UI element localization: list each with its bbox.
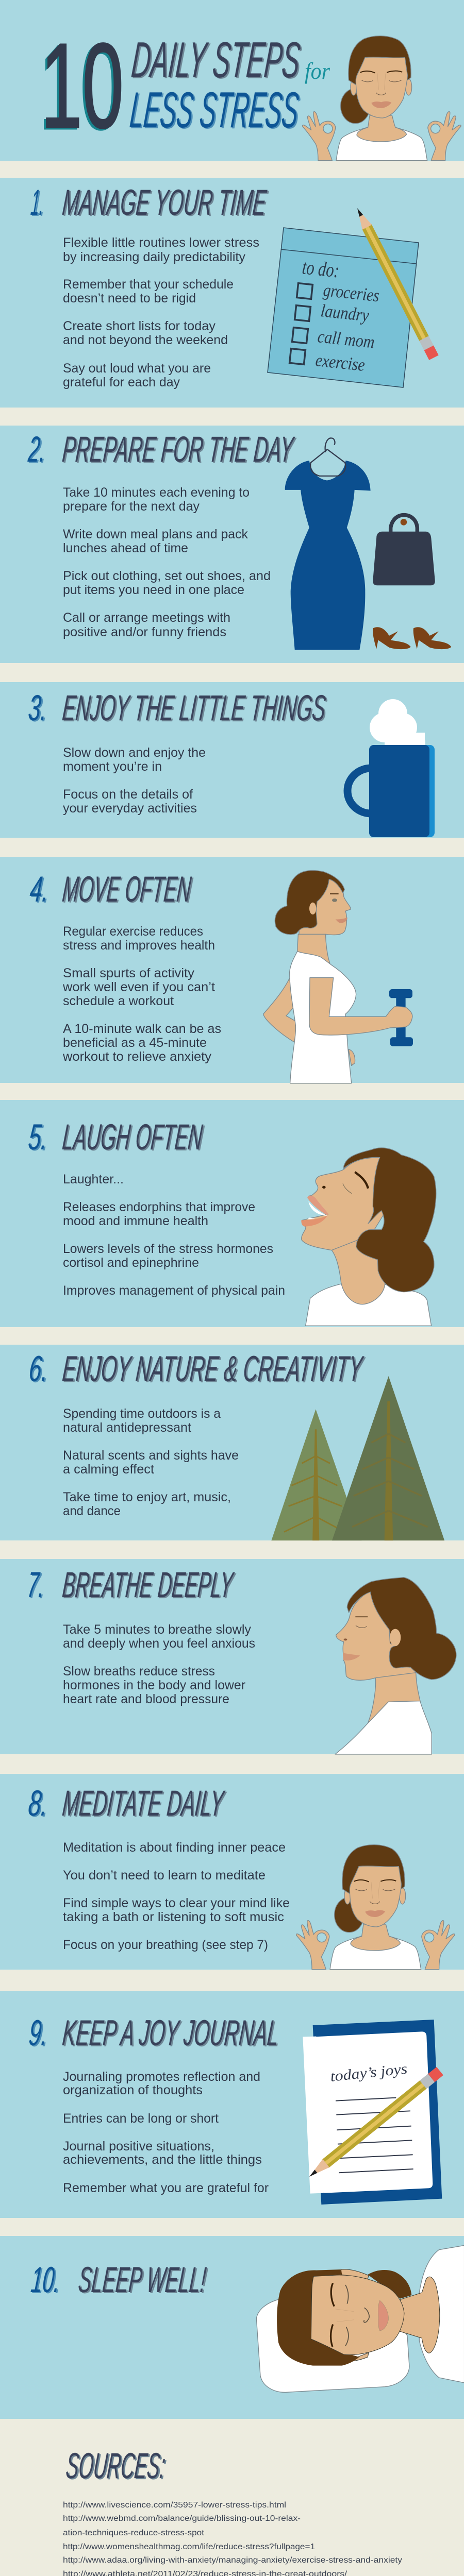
text block: Improves management of physical pain: [63, 1283, 285, 1298]
icon: journal page: today’s joys: [329, 2060, 408, 2085]
text block: and dance: [63, 1504, 121, 1518]
text block: Lowers levels of the stress hormones: [63, 1242, 273, 1256]
source list: http://www.livescience.com/35957-lower-stress-tips.html: [63, 2501, 286, 2510]
text block: Create short lists for today: [63, 319, 216, 333]
text block: Find simple ways to clear your mind like: [63, 1896, 290, 1910]
heading: sleep well: [29, 2260, 208, 2300]
text block: doesn’t need to be rigid: [63, 291, 196, 306]
heading: prepare for the day: 2.: [26, 429, 47, 469]
text block: Flexible little routines lower stress: [63, 235, 259, 250]
text block: Natural scents and sights have: [63, 1448, 239, 1463]
text block: Say out loud what you are: [63, 361, 211, 376]
text block: natural antidepressant: [63, 1420, 191, 1435]
text block: A 10-minute walk can be as: [63, 1022, 221, 1036]
text block: prepare for the next day: [63, 499, 200, 514]
text block: [63, 1622, 255, 1706]
text block: achievements, and the little things: [63, 2153, 262, 2167]
heading: enjoy nature and creativity: [27, 1349, 365, 1389]
heading: laugh often: 5.: [27, 1117, 49, 1157]
text block: Regular exercise reduces: [63, 924, 203, 939]
heading: sources: SOURCES:: [64, 2446, 167, 2486]
icon: to-do note: laundry: [320, 300, 370, 326]
icon: woman breathing in profile: [335, 1578, 456, 1754]
icon: pencil: [353, 206, 439, 360]
icon: mug with whipped cream: [347, 699, 435, 837]
icon: dress, bag and shoes: [285, 438, 451, 650]
heading: enjoy the little things: 3.: [27, 688, 49, 728]
text block: cortisol and epinephrine: [63, 1256, 199, 1270]
text block: Pick out clothing, set out shoes, and: [63, 569, 271, 583]
text block: Small spurts of activity: [63, 966, 195, 980]
heading: meditate daily: [27, 1783, 226, 1823]
panel: step 4: [28, 869, 413, 1083]
icon: sleeping woman: [256, 2245, 464, 2392]
text block: Entries can be long or short: [63, 2111, 219, 2126]
text block: [62, 924, 221, 1064]
source list: [63, 2501, 402, 2576]
text block: Remember that your schedule: [63, 277, 234, 292]
heading: keep a joy journal: [27, 2013, 280, 2053]
heading: manage your time: 1.: [29, 182, 46, 223]
text block: Spending time outdoors is a: [63, 1406, 221, 1421]
text block: taking a bath or listening to soft music: [63, 1910, 284, 1924]
text block: [63, 235, 259, 389]
source list: http://www.womenshealthmag.com/life/reduce-stress?fullpage=1: [63, 2543, 315, 2551]
panel: step 10: [29, 2245, 464, 2392]
heading: enjoy the little things: [27, 688, 327, 728]
icon: pencil: [306, 2067, 443, 2181]
text block: [63, 1840, 290, 1952]
heading: manage your time: [29, 182, 268, 223]
source list: http://www.webmd.com/balance/guide/blissing-out-10-relax-: [63, 2514, 301, 2523]
heading: laugh often: LAUGH OFTEN: [61, 1117, 204, 1157]
icon: journal page: [303, 2020, 442, 2205]
heading: prepare for the day: [26, 429, 296, 469]
text block: Releases endorphins that improve: [63, 1200, 255, 1214]
text block: Slow breaths reduce stress: [63, 1664, 215, 1679]
text block: by increasing daily predictability: [63, 250, 246, 264]
text block: Write down meal plans and pack: [63, 527, 248, 541]
text block: stress and improves health: [63, 938, 215, 953]
title: 10 daily steps for less stress: [41, 18, 330, 153]
panel: step 1: [29, 182, 439, 389]
text block: organization of thoughts: [63, 2083, 203, 2097]
source list: ation-techniques-reduce-stress-spot: [63, 2529, 205, 2537]
heading: move often: MOVE OFTEN: [61, 869, 193, 909]
text block: Journaling promotes reflection and: [63, 2070, 260, 2084]
panel: sources and credits: [63, 2446, 402, 2576]
text block: mood and immune health: [63, 1214, 208, 1228]
text block: [63, 1172, 285, 1298]
text block: and not beyond the weekend: [63, 333, 228, 347]
text block: heart rate and blood pressure: [63, 1692, 229, 1706]
text block: Take 5 minutes to breathe slowly: [63, 1622, 251, 1637]
heading: move often: [28, 869, 193, 909]
panel: step 9: [27, 2013, 443, 2205]
text block: schedule a workout: [63, 994, 174, 1008]
heading: breathe deeply: BREATHE DEEPLY: [61, 1565, 236, 1605]
source list: http://www.adaa.org/living-with-anxiety/managing-anxiety/exercise-stress-and-anxiety: [63, 2556, 402, 2565]
heading: manage your time: MANAGE YOUR TIME: [61, 182, 268, 223]
heading line 1: DAILY STEPS: [129, 31, 303, 88]
icon: to-do note: to do:: [301, 255, 340, 282]
icon: to-do note: groceries: [322, 280, 380, 306]
text block: [63, 2070, 269, 2195]
text block: Remember what you are grateful for: [63, 2181, 269, 2195]
text block: moment you’re in: [63, 759, 162, 774]
text block: Laughter...: [63, 1172, 124, 1187]
panel: step 6: [27, 1349, 444, 1540]
text block: put items you need in one place: [63, 583, 244, 597]
big number 10: 10: [41, 18, 124, 153]
text block: Take 10 minutes each evening to: [63, 485, 250, 500]
text block: your everyday activities: [63, 801, 197, 816]
heading: enjoy nature and creativity: 6.: [27, 1349, 50, 1389]
panel: step 3: [27, 688, 435, 837]
text block: work well even if you can’t: [62, 980, 215, 994]
panel: step 5: [27, 1117, 436, 1326]
icon: meditating woman: [296, 1845, 455, 1970]
text block: Journal positive situations,: [63, 2139, 214, 2154]
text block: grateful for each day: [63, 375, 180, 389]
text block: workout to relieve anxiety: [62, 1049, 211, 1064]
icon: meditating woman header: [303, 36, 461, 161]
heading: meditate daily: 8.: [27, 1783, 49, 1823]
text block: positive and/or funny friends: [63, 625, 226, 639]
text block: Call or arrange meetings with: [63, 611, 230, 625]
panel: step 2: [26, 429, 451, 650]
text block: Meditation is about finding inner peace: [63, 1840, 286, 1855]
heading: laugh often: [27, 1117, 204, 1157]
icon: pine trees: [271, 1376, 444, 1540]
heading: breathe deeply: [26, 1565, 236, 1605]
heading: sleep well: SLEEP WELL!: [77, 2260, 208, 2300]
text block: Focus on your breathing (see step 7): [63, 1938, 268, 1952]
heading: keep a joy journal: KEEP A JOY JOURNAL: [61, 2013, 280, 2053]
heading: keep a joy journal: 9.: [27, 2013, 49, 2053]
script word for: for: [305, 58, 330, 84]
text block: You don’t need to learn to meditate: [63, 1868, 266, 1883]
text block: a calming effect: [63, 1462, 154, 1477]
icon: to-do note: call mom: [317, 326, 376, 352]
heading: move often: 4.: [28, 869, 51, 909]
icon: laughing woman: [301, 1148, 436, 1326]
text block: beneficial as a 45-minute: [63, 1036, 207, 1050]
text block: [63, 485, 271, 639]
text block: Take time to enjoy art, music,: [63, 1490, 231, 1504]
icon: to-do note: [268, 228, 419, 387]
icon: woman lifting dumbbell: [263, 871, 413, 1083]
heading: sleep well: 10.: [29, 2260, 62, 2300]
panel: step 7: [26, 1565, 456, 1754]
text block: lunches ahead of time: [63, 541, 188, 555]
text block: Slow down and enjoy the: [63, 745, 206, 760]
text block: [63, 745, 206, 816]
text block: hormones in the body and lower: [63, 1678, 245, 1692]
heading: breathe deeply: 7.: [26, 1565, 46, 1605]
text block: Focus on the details of: [63, 787, 193, 802]
text block: and deeply when you feel anxious: [63, 1636, 255, 1651]
heading: meditate daily: MEDITATE DAILY: [61, 1783, 226, 1823]
text block: [63, 1406, 239, 1518]
icon: to-do note: exercise: [314, 350, 366, 375]
panel: step 8: [27, 1783, 455, 1970]
